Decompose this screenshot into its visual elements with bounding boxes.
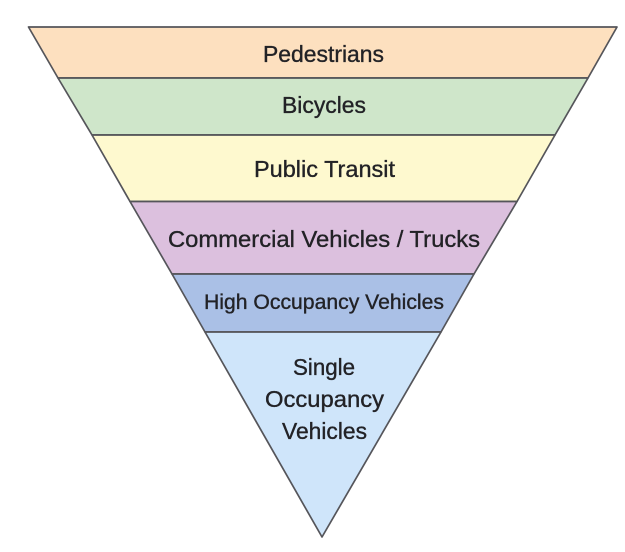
tier: Public Transit: Public Transit	[254, 156, 396, 182]
tier: Commercial Vehicles / Trucks: Commercial Vehicles / Trucks	[168, 226, 480, 252]
tier: Commercial Vehicles / Trucks	[130, 202, 517, 274]
tier: Bicycles: Bicycles	[282, 92, 366, 118]
label line: Occupancy: Occupancy	[265, 386, 385, 412]
tier: High Occupancy Vehicles	[172, 274, 474, 332]
tier: Bicycles	[58, 78, 588, 135]
tier: Public Transit	[92, 135, 555, 202]
tier: Pedestrians: Pedestrians	[263, 41, 384, 67]
tier: High Occupancy Vehicles: High Occupancy Vehicles	[204, 291, 444, 314]
tier: Pedestrians	[28, 27, 617, 78]
label line: Single: Single	[293, 354, 355, 380]
tier: Single Occupancy Vehicles	[205, 332, 441, 537]
label line: Vehicles: Vehicles	[282, 418, 367, 444]
